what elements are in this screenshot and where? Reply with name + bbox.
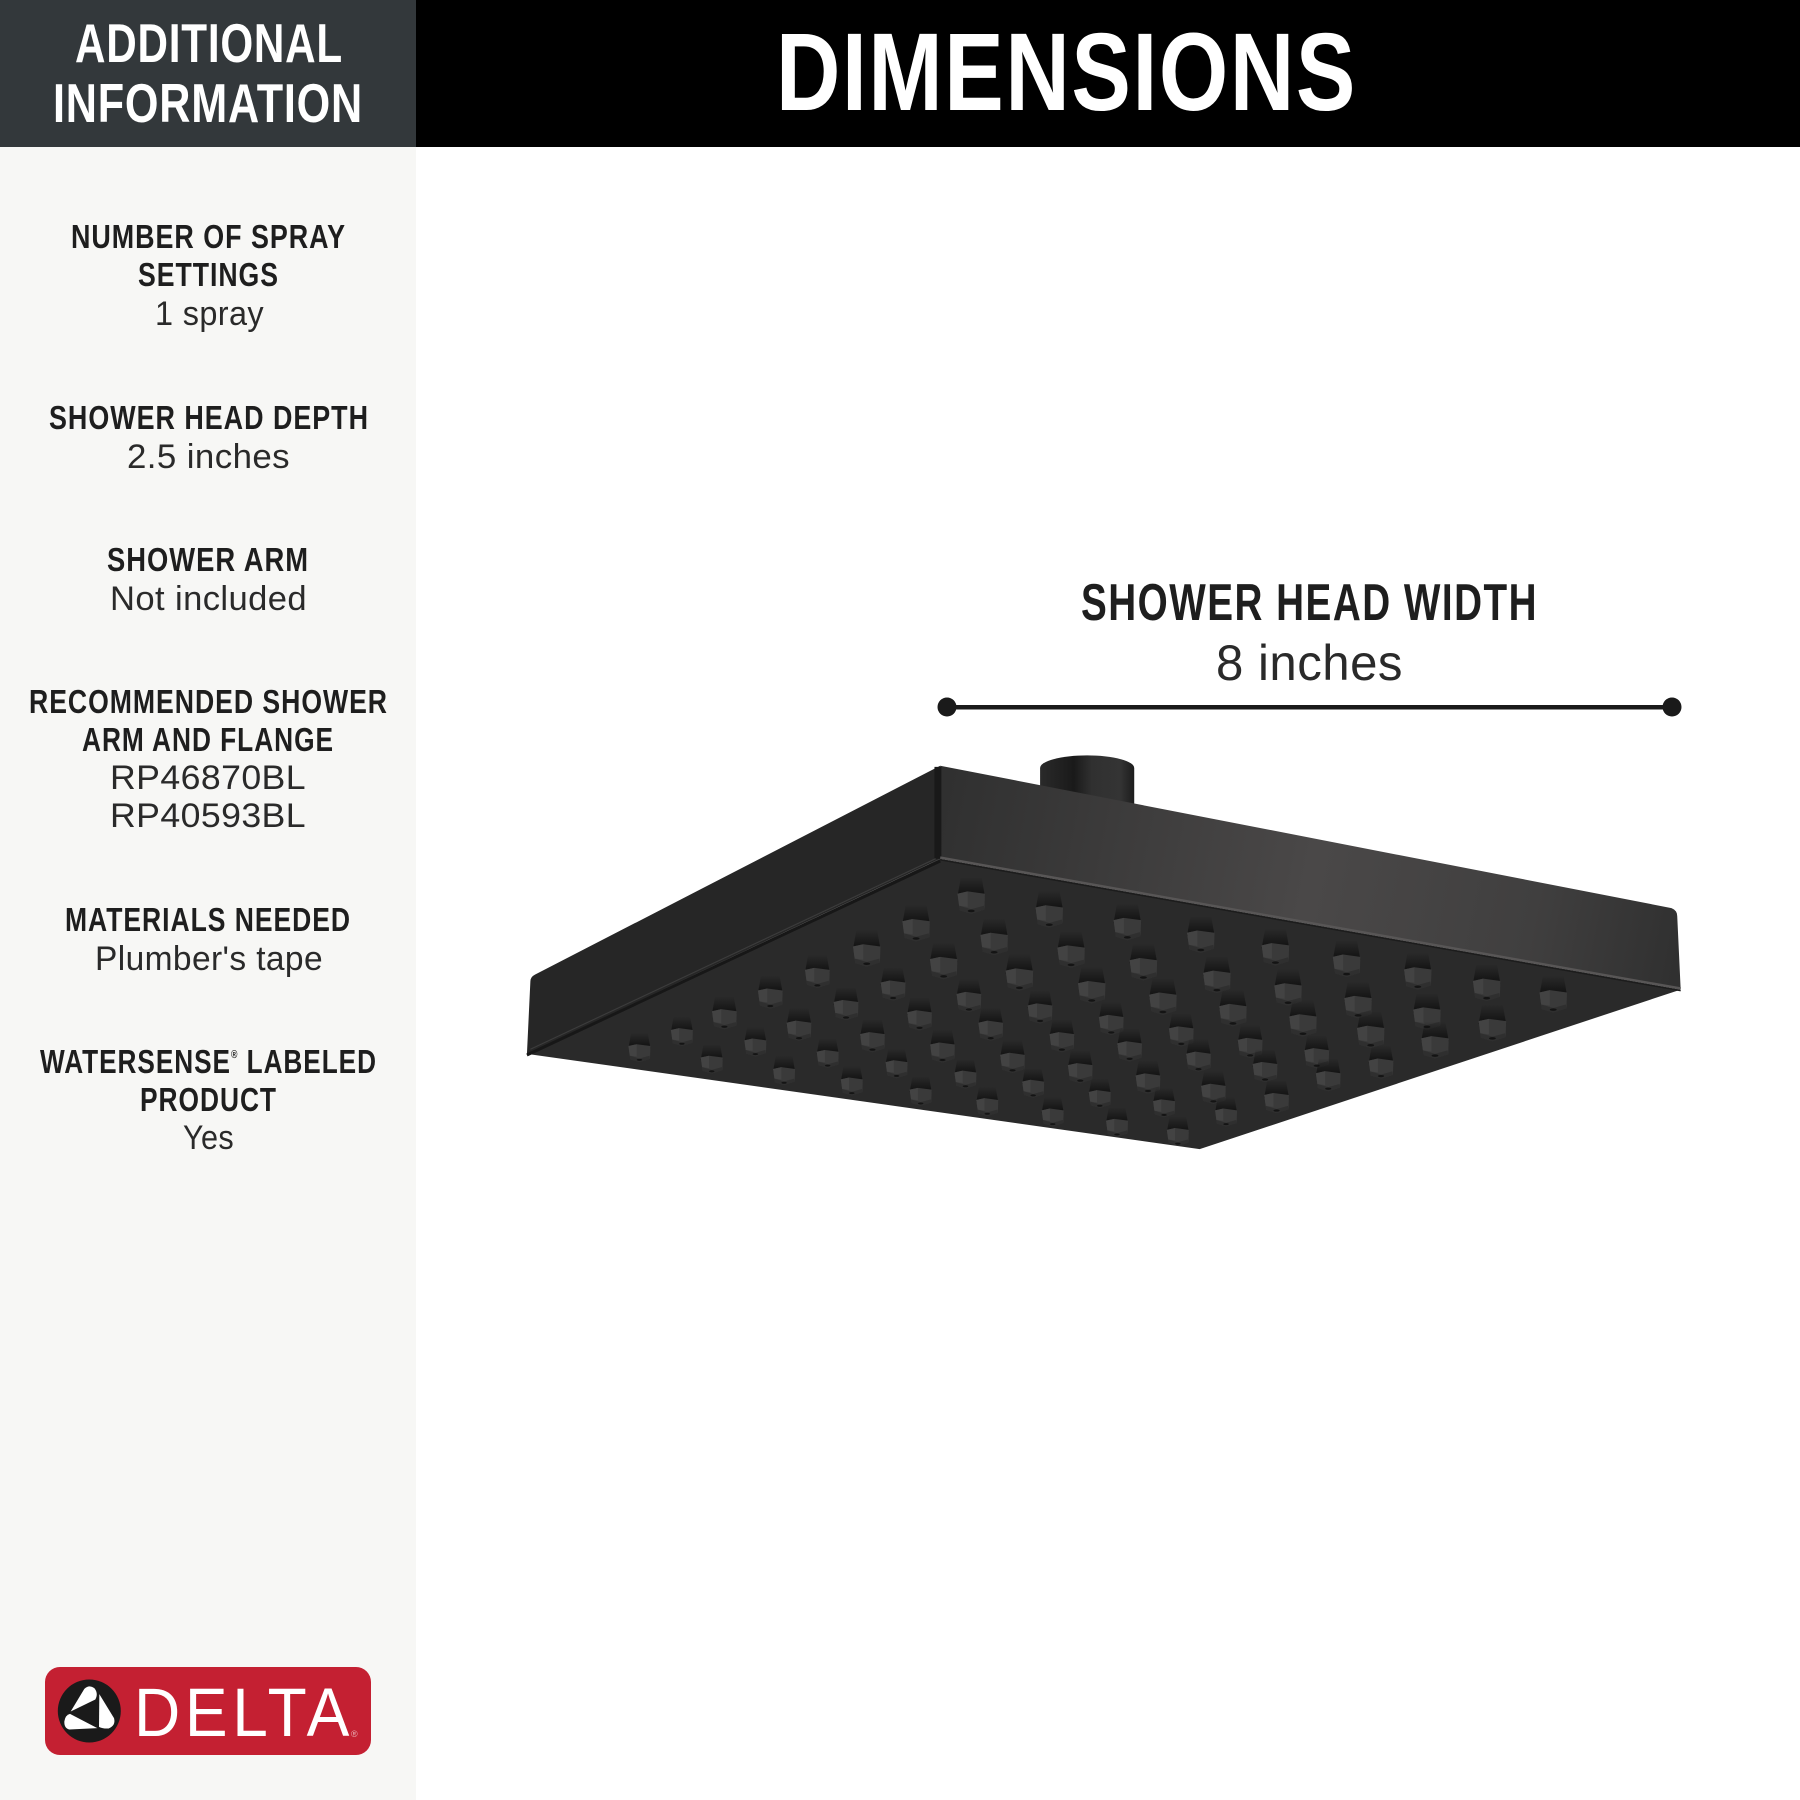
- header band: additional information: INFORMATION: [53, 72, 363, 134]
- spec: recommended shower arm and flange: ARM AND FLANGE: [82, 721, 334, 758]
- spec: recommended shower arm and flange: RP46870BL: [110, 759, 306, 797]
- spec: materials needed: [65, 901, 351, 978]
- spec: watersense labeled product: PRODUCT: [140, 1081, 277, 1118]
- spec: materials needed: MATERIALS NEEDED: [65, 901, 351, 938]
- corner and bevel edges: [527, 767, 1681, 1055]
- spec: recommended shower arm and flange: [29, 683, 388, 835]
- delta logo: [45, 1667, 371, 1755]
- header band: dimensions: [416, 0, 1800, 147]
- spec: shower head depth: [49, 399, 369, 476]
- shower head illustration: [527, 755, 1681, 1149]
- spec: recommended shower arm and flange: RP40593BL: [110, 797, 306, 835]
- spec: shower head depth: 2.5 inches: [127, 438, 290, 476]
- header band: additional information: [0, 0, 416, 147]
- dimension line: [938, 698, 1682, 716]
- spec: shower head depth: SHOWER HEAD DEPTH: [49, 399, 369, 436]
- spec: shower arm: [107, 541, 309, 618]
- icon: delta emblem: [58, 1680, 121, 1742]
- spec: number of spray settings: NUMBER OF SPRAY: [71, 218, 346, 255]
- width label: SHOWER HEAD WIDTH: [1081, 574, 1538, 632]
- width label: [1081, 574, 1538, 691]
- spec: number of spray settings: SETTINGS: [138, 256, 279, 293]
- spec: materials needed: Plumber's tape: [95, 940, 323, 978]
- header band: additional information: ADDITIONAL: [75, 12, 343, 74]
- underside face: [527, 859, 1681, 1149]
- spec: recommended shower arm and flange: RECOMMENDED SHOWER: [29, 683, 388, 720]
- spec: number of spray settings: 1 spray: [155, 295, 264, 333]
- registered mark: ®: [351, 1729, 358, 1739]
- spec: watersense labeled product: WATERSENSE: [40, 1043, 281, 1080]
- spec: shower arm: SHOWER ARM: [107, 541, 309, 578]
- front face: [940, 766, 1681, 990]
- spec: watersense labeled product: Yes: [183, 1119, 234, 1157]
- side face: [527, 766, 940, 1054]
- shower arm stub: [1040, 755, 1134, 809]
- panel: additional information sidebar: [0, 146, 416, 1800]
- spec: watersense labeled product: ®: [231, 1049, 238, 1061]
- width label: 8 inches: [1216, 635, 1403, 691]
- spec: watersense labeled product: [40, 1043, 377, 1157]
- spec: shower arm: Not included: [110, 580, 307, 618]
- logo badge: [45, 1667, 371, 1755]
- spec: number of spray settings: [71, 218, 346, 333]
- logo wordmark: DELTA: [134, 1674, 354, 1751]
- spec: watersense labeled product: LABELED: [238, 1043, 377, 1080]
- nozzle grid: [628, 877, 1567, 1146]
- header band: dimensions: DIMENSIONS: [776, 11, 1357, 134]
